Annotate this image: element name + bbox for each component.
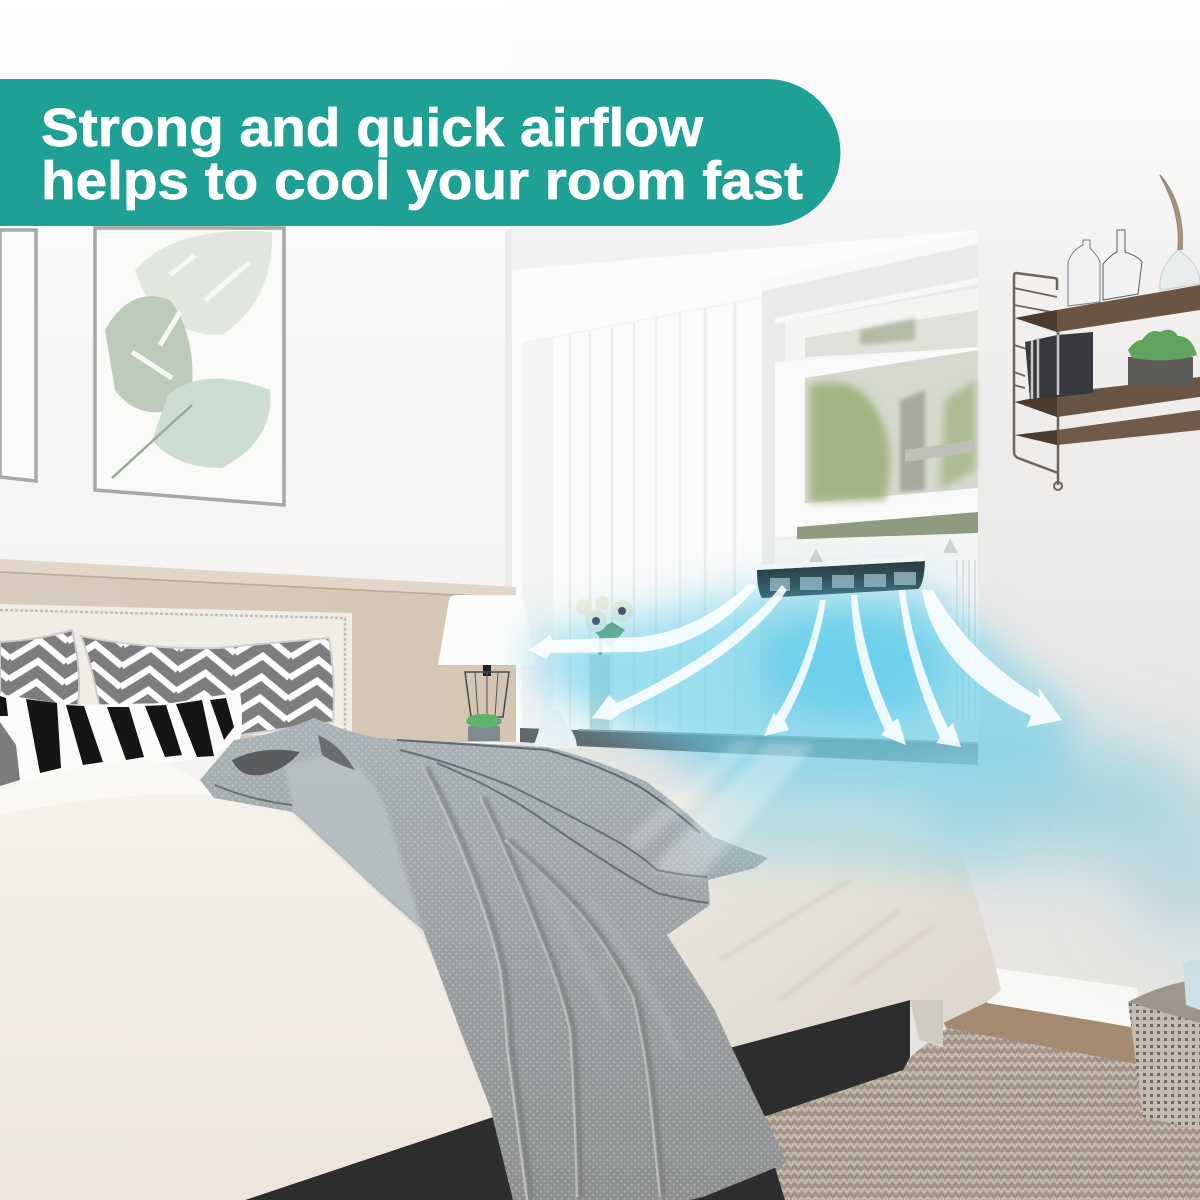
cool air glow (528, 588, 1200, 940)
headline banner: helps to cool your room fast (41, 151, 803, 211)
laundry basket (1128, 960, 1200, 1130)
window panes and garden view (775, 288, 978, 600)
arrow: centre left (764, 600, 826, 736)
duvet left side (0, 760, 520, 1200)
headline banner (0, 79, 840, 226)
window sill (520, 728, 978, 765)
wooden headboard panel (0, 559, 516, 742)
white vases (532, 692, 577, 748)
wall shelf (1014, 175, 1200, 490)
wall art: monstera frame (95, 228, 284, 505)
arrow: far right (922, 590, 1062, 727)
flowers in vase (576, 596, 633, 730)
window recess and frame (505, 230, 978, 765)
air conditioner unit (755, 538, 980, 722)
wall art: left frame (0, 230, 36, 481)
headline banner: Strong and quick airflow (41, 98, 704, 158)
chevron pillow left (0, 630, 79, 705)
duvet right side (620, 780, 1001, 1047)
floor and baseboard (930, 968, 1200, 1085)
striped pillow (0, 692, 242, 786)
arrow: centre right (851, 595, 906, 745)
grey throw blanket (200, 718, 787, 1200)
airflow arrows (529, 583, 1062, 747)
upholstered headboard (0, 604, 352, 735)
chevron pillow right (81, 636, 334, 735)
arrow: far left (529, 583, 756, 659)
rug (760, 1028, 1200, 1200)
bed base (245, 1000, 910, 1200)
bedside lamp (438, 595, 536, 741)
arrow: lower left (592, 585, 787, 720)
arrow: right (899, 590, 961, 747)
